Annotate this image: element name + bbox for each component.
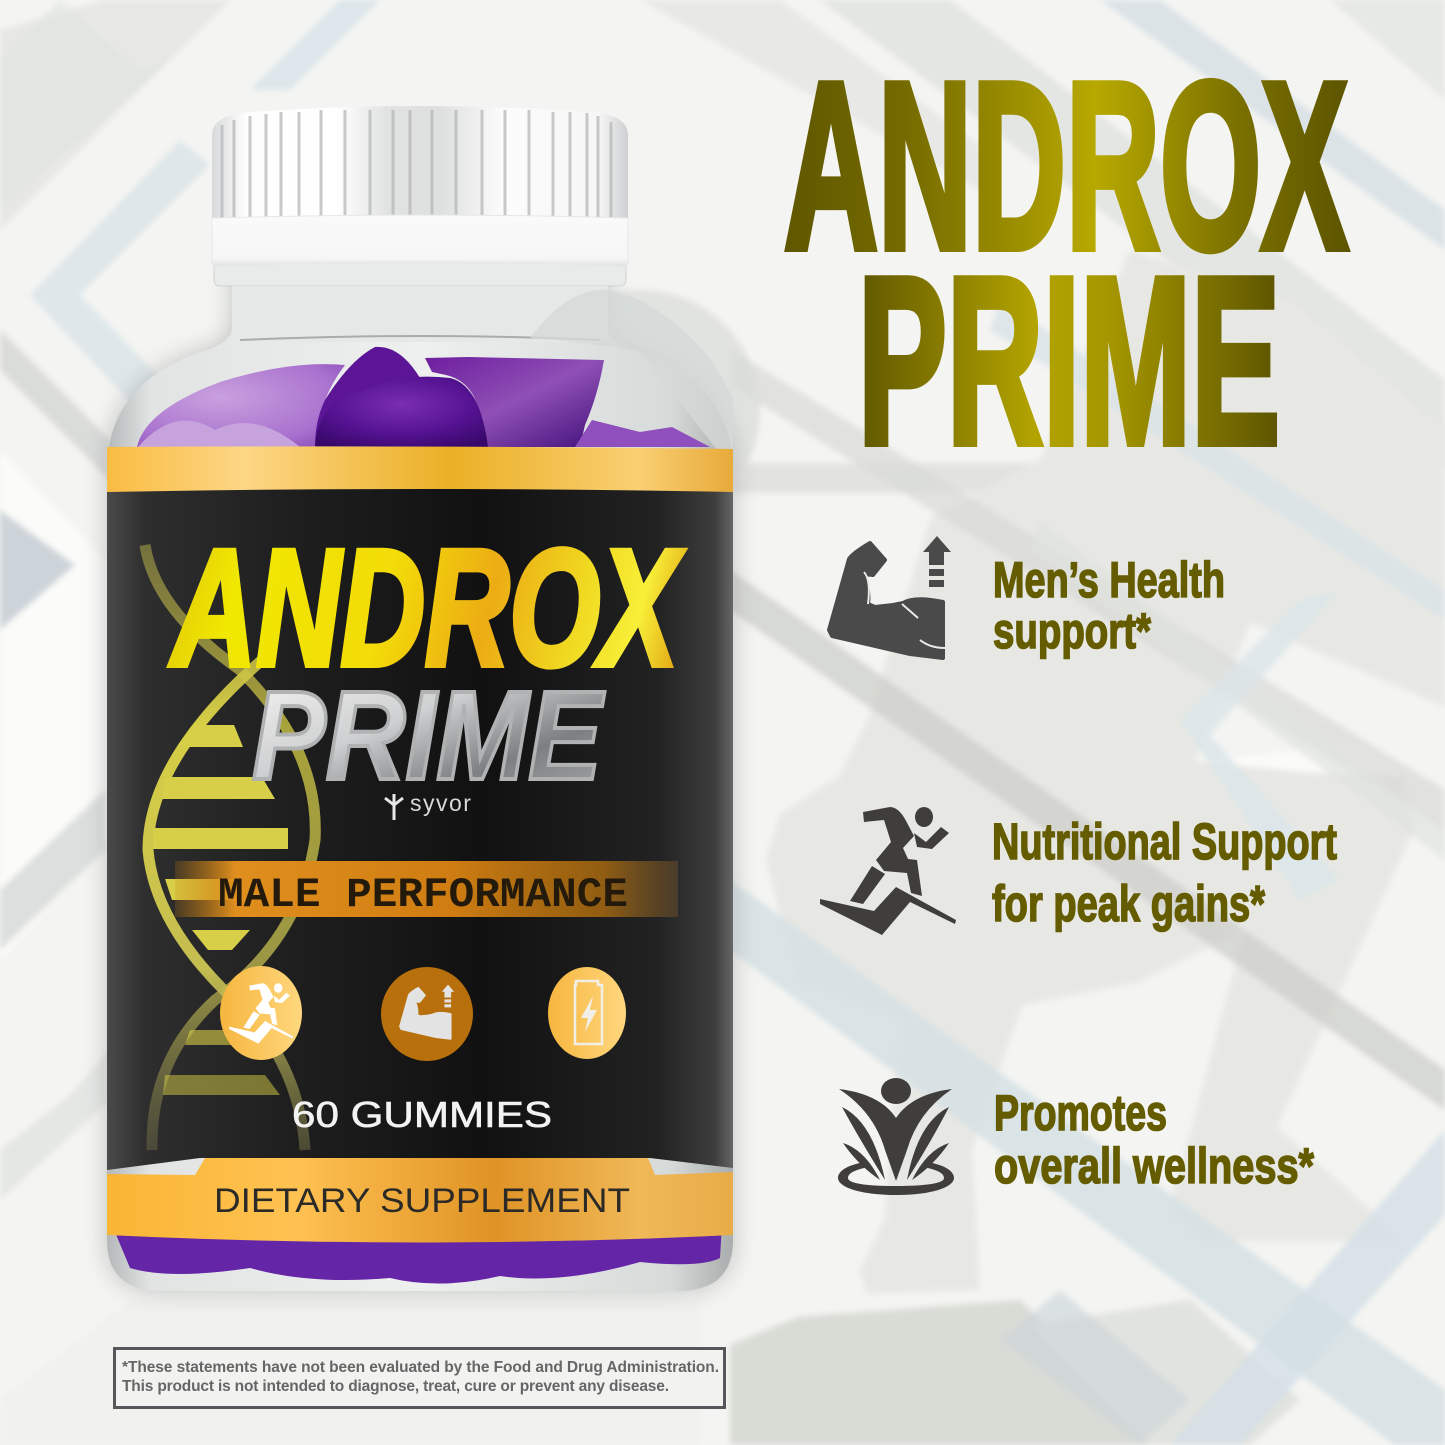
- feature text: Men’s Health: [993, 552, 1225, 608]
- label icon: runner: [220, 966, 302, 1060]
- feature text: [993, 552, 1225, 659]
- feature text: overall wellness*: [994, 1138, 1314, 1194]
- bottle cap: [212, 106, 628, 266]
- top orange band: [107, 446, 733, 492]
- feature text: [994, 1085, 1314, 1194]
- disclaimer box: [114, 1348, 724, 1408]
- brand name ANDROX: ANDROX: [169, 516, 684, 701]
- feature text: for peak gains*: [992, 875, 1265, 932]
- label icon: muscle: [381, 967, 473, 1061]
- title: [784, 34, 1348, 494]
- feature text: support*: [993, 603, 1151, 659]
- 60 gummies: 60 GUMMIES: [292, 1094, 552, 1135]
- syvor logo: syvor: [410, 790, 472, 816]
- bottom orange band: [107, 1158, 733, 1242]
- icon: runner: [820, 807, 956, 935]
- disclaimer box: *These statements have not been evaluated by the Food and Drug Administration.: [122, 1359, 719, 1376]
- feature text: Promotes: [994, 1085, 1167, 1141]
- icon: muscle arm: [829, 536, 951, 658]
- bottle body glass: [107, 268, 733, 1291]
- purple gummies bottom: [112, 1225, 722, 1284]
- icon: wellness figure: [838, 1078, 954, 1195]
- athlete silhouette: [520, 250, 1445, 1445]
- feature: men's health: [829, 536, 1225, 659]
- neck glass: [214, 262, 733, 470]
- male performance banner: [175, 861, 678, 919]
- male performance banner: MALE PERFORMANCE: [218, 871, 628, 919]
- feature text: Nutritional Support: [992, 813, 1337, 870]
- disclaimer box: This product is not intended to diagnose, treat, cure or prevent any disease.: [122, 1378, 669, 1395]
- dietary supplement: DIETARY SUPPLEMENT: [214, 1182, 630, 1220]
- syvor logo: [385, 790, 472, 820]
- feature: nutritional support: [820, 807, 1337, 935]
- purple gummies top: [137, 347, 710, 447]
- bottle shadow: [107, 268, 733, 1291]
- feature: wellness: [838, 1078, 1314, 1195]
- feature text: [992, 813, 1337, 932]
- brand name PRIME: PRIME: [252, 665, 605, 806]
- product bottle: [107, 106, 733, 1291]
- label icon: battery: [548, 967, 626, 1059]
- label black panel: [107, 488, 733, 1170]
- DNA helix: [145, 545, 315, 1150]
